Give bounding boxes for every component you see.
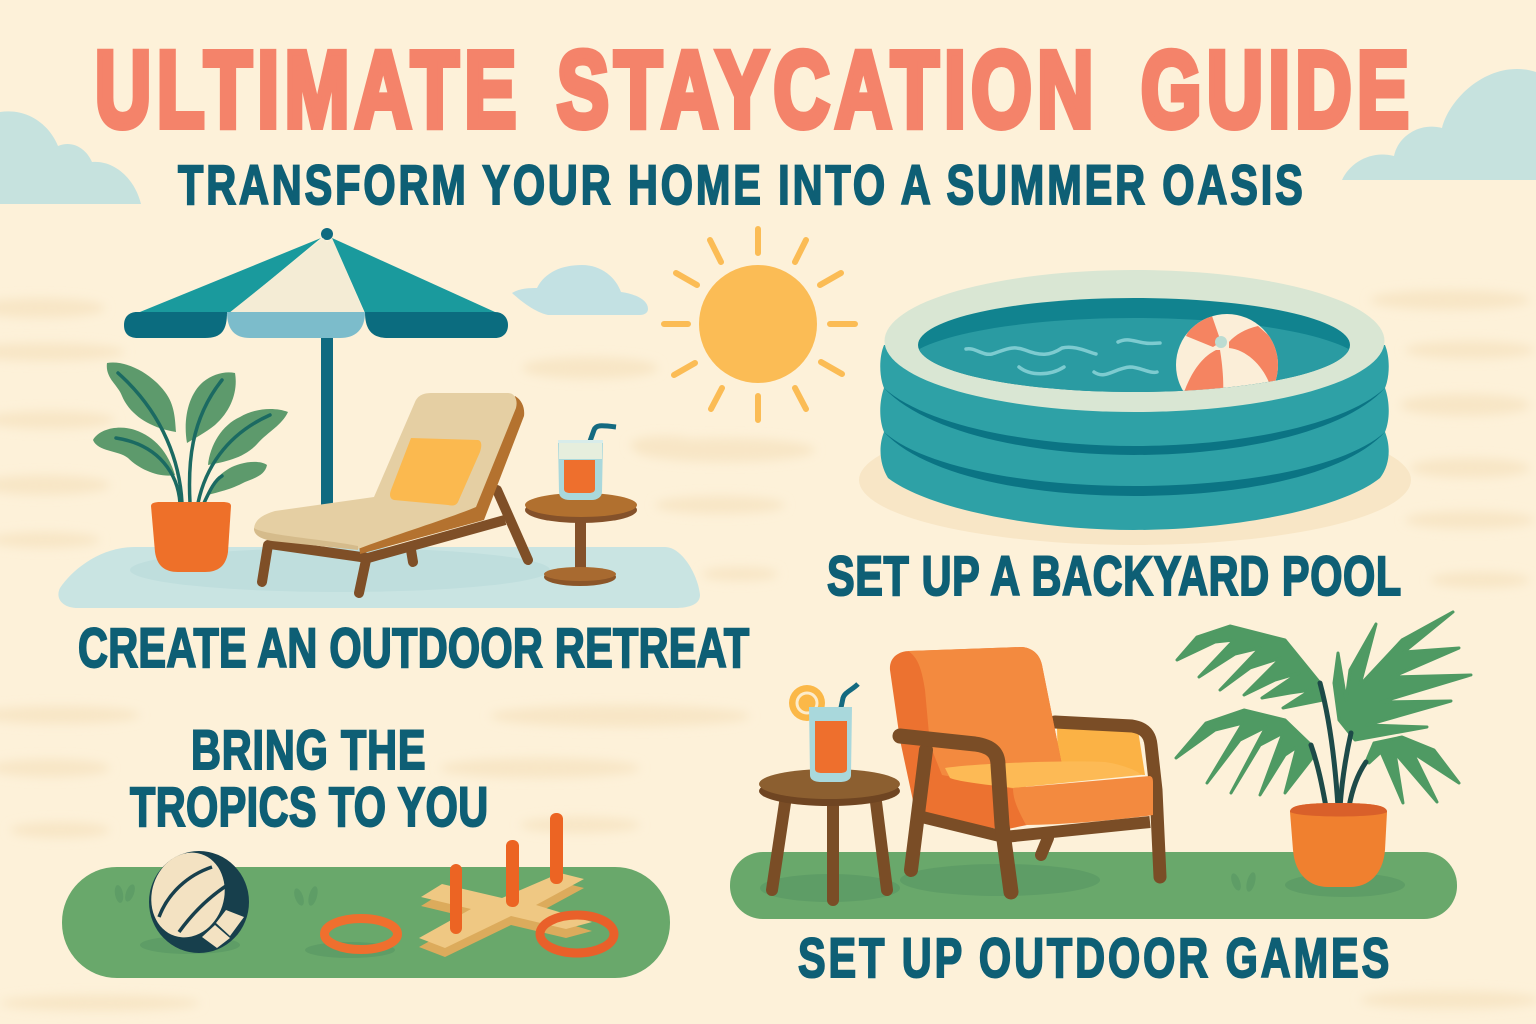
- icon: volleyball: [140, 843, 249, 953]
- icon: side table with drink: [525, 426, 637, 586]
- panel: outdoor retreat: [58, 228, 700, 608]
- heading: bring the tropics: BRING THE: [191, 719, 426, 782]
- icon: small cloud centre: [512, 265, 648, 315]
- title: [95, 29, 1409, 149]
- title: GUIDE: [1141, 29, 1409, 149]
- panel: outdoor games seating: [730, 612, 1471, 919]
- icon: potted plant: [93, 363, 288, 572]
- icon: palm plant: [1176, 612, 1471, 887]
- heading: outdoor games: SET UP OUTDOOR GAMES: [798, 927, 1389, 990]
- icon: armchair: [890, 647, 1160, 892]
- rug shadow: [130, 548, 550, 592]
- heading: bring the tropics: TROPICS TO YOU: [130, 776, 488, 839]
- icon: side table: [759, 769, 900, 900]
- panel: backyard pool: [859, 270, 1411, 545]
- heading: bring the tropics: [130, 719, 488, 839]
- icon: ring toss board: [324, 813, 614, 957]
- rug: [58, 547, 700, 608]
- icon: beach ball: [1176, 314, 1278, 391]
- subtitle: TRANSFORM YOUR HOME INTO A SUMMER OASIS: [178, 154, 1303, 217]
- icon: cloud top right: [1342, 69, 1536, 180]
- heading: outdoor retreat: CREATE AN OUTDOOR RETREAT: [78, 617, 749, 680]
- icon: cloud top left: [0, 111, 141, 204]
- icon: drink with citrus: [789, 684, 858, 782]
- panel: lawn games: [62, 813, 670, 978]
- icon: sun: [664, 229, 855, 420]
- icon: inflatable pool: [880, 270, 1389, 530]
- icon: umbrella: [124, 228, 508, 508]
- title: STAYCATION: [557, 29, 1093, 149]
- heading: backyard pool: SET UP A BACKYARD POOL: [827, 545, 1401, 608]
- title: ULTIMATE: [95, 29, 516, 149]
- icon: lounge chair: [254, 393, 528, 593]
